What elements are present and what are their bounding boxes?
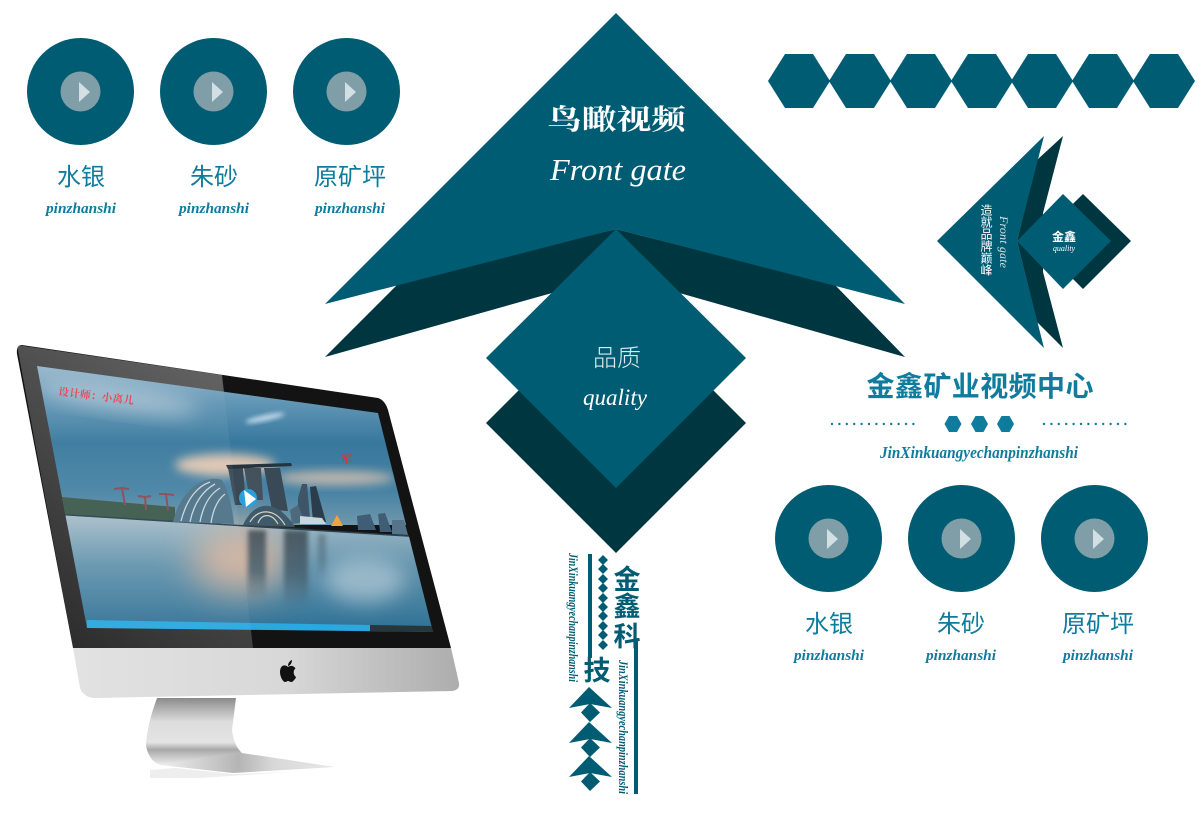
video item: 水银: pinzhanshi <box>44 201 117 217</box>
video item: 朱砂: 朱砂 <box>190 164 238 191</box>
panel: bottom-right video circles <box>775 485 1148 664</box>
video item: 朱砂 <box>908 485 1015 664</box>
video item: 原矿坪: pinzhanshi <box>1061 648 1134 664</box>
panel: right small arrow <box>937 136 1131 348</box>
subheading: Front gate: Front gate <box>549 152 686 187</box>
video item: 水银 <box>27 38 134 217</box>
label: quality: quality <box>1053 244 1076 253</box>
monitor screen <box>37 366 433 632</box>
video item: 朱砂: 朱砂 <box>937 611 985 638</box>
illustration: desktop monitor <box>17 345 459 778</box>
icon: apple logo <box>280 660 296 682</box>
hexagon row <box>768 54 1195 108</box>
left line <box>588 554 592 658</box>
video item: 水银: 水银 <box>57 164 105 191</box>
brand characters: 鑫 <box>614 591 640 622</box>
diamond shadow <box>486 293 746 553</box>
panel: section title <box>832 371 1128 462</box>
label: 品质: 品质 <box>593 345 641 372</box>
diamond <box>486 229 746 488</box>
left script text: JinXinkuangyechanpinzhanshi <box>566 552 581 682</box>
video item: 水银: 水银 <box>805 611 853 638</box>
rotated text: Front gate: Front gate <box>997 215 1011 269</box>
video item: 水银 <box>775 485 882 664</box>
diamond chain <box>598 555 608 650</box>
arrow shadow wings <box>325 229 905 357</box>
bezel glare <box>17 345 253 648</box>
video item: 原矿坪: 原矿坪 <box>1062 611 1134 638</box>
diamond shadow <box>1035 194 1131 289</box>
brand characters <box>584 565 640 686</box>
progress bar <box>87 620 370 631</box>
screen glass reflection <box>48 387 250 630</box>
panel: vertical brand column <box>566 552 640 794</box>
arrow shadow <box>1017 136 1063 348</box>
vertical text: 造就品牌巅峰: 造就品牌巅峰 <box>979 204 993 276</box>
video item: 原矿坪: 原矿坪 <box>314 164 386 191</box>
heading: 鸟瞰视频: 鸟瞰视频 <box>547 104 688 136</box>
right line <box>634 640 638 794</box>
play button <box>239 489 257 507</box>
brand characters: 技 <box>584 656 610 686</box>
video item: 朱砂 <box>160 38 267 217</box>
red mark: 军 <box>341 452 352 466</box>
video item: 朱砂: pinzhanshi <box>924 648 997 664</box>
video item: 原矿坪: pinzhanshi <box>313 201 386 217</box>
right script text: JinXinkuangyechanpinzhanshi <box>616 659 631 794</box>
monitor stand <box>146 698 335 778</box>
video item: 原矿坪 <box>293 38 400 217</box>
panel: top-left video circles <box>27 38 400 217</box>
video item: 朱砂: pinzhanshi <box>177 201 250 217</box>
designer credit: 设计师：小离儿 <box>58 385 135 407</box>
brand characters: 金 <box>614 565 640 595</box>
video item: 水银: pinzhanshi <box>792 648 865 664</box>
monitor chin <box>73 648 459 698</box>
monitor bezel <box>17 345 451 648</box>
brand characters: 科 <box>614 622 640 652</box>
dotted divider with hexagons <box>832 416 1128 432</box>
diamond <box>1017 194 1111 289</box>
label: 金鑫: 金鑫 <box>1052 229 1076 244</box>
tower reflections <box>248 530 326 608</box>
script subtitle: JinXinkuangyechanpinzhanshi <box>879 443 1078 462</box>
skyline <box>62 463 420 538</box>
heading: 金鑫矿业视频中心: 金鑫矿业视频中心 <box>866 371 1094 402</box>
arrow head <box>325 13 905 304</box>
triangle and diamond stack <box>569 687 612 791</box>
arrow head <box>937 136 1044 348</box>
panel: central arrow and diamond <box>325 13 905 553</box>
video item: 原矿坪 <box>1041 485 1148 664</box>
label: quality: quality <box>583 385 648 410</box>
